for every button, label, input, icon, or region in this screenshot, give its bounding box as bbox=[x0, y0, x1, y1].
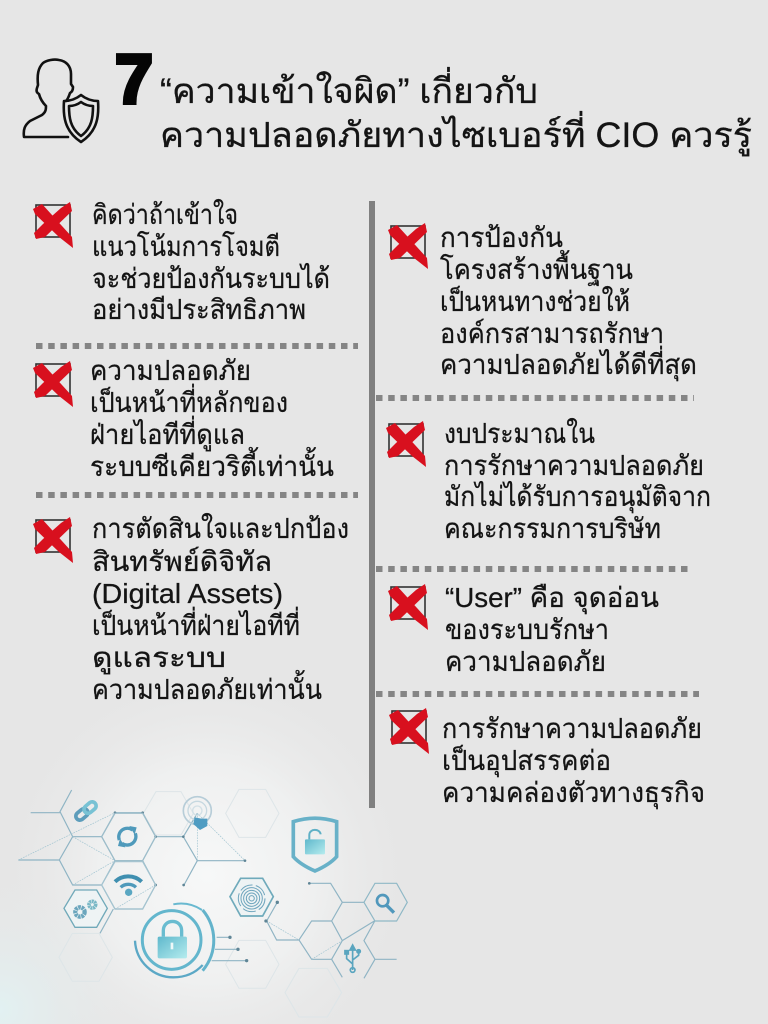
text: item 5: การรักษาความปลอดภัย bbox=[444, 450, 704, 481]
text: item 4: โครงสร้างพื้นฐาน bbox=[440, 250, 633, 286]
icon: red cross bbox=[389, 708, 429, 754]
text: item 3: การตัดสินใจและปกป้อง bbox=[92, 513, 349, 544]
icon: touch signal bbox=[183, 797, 211, 830]
icon: red cross bbox=[388, 223, 428, 269]
icon: fingerprint hexagon bbox=[230, 878, 273, 916]
illustration: cyber security network bbox=[18, 789, 407, 1017]
icon: red cross bbox=[388, 584, 428, 630]
icon: red cross bbox=[33, 202, 73, 248]
text: item 6: ของระบบรักษา bbox=[445, 614, 609, 645]
icon: user with shield bbox=[24, 60, 98, 142]
text: item 7: เป็นอุปสรรคต่อ bbox=[442, 743, 611, 778]
text: item 2: ฝ่ายไอทีที่ดูแล bbox=[90, 416, 245, 452]
text: item 2: ความปลอดภัย bbox=[90, 355, 251, 386]
right item 3 bbox=[388, 582, 659, 677]
text: item 6: ความปลอดภัย bbox=[445, 646, 606, 677]
text: item 6: “User” คือ จุดอ่อน bbox=[445, 582, 659, 615]
left item 3 bbox=[33, 513, 349, 705]
text: item 3: สินทรัพย์ดิจิทัล bbox=[92, 546, 272, 577]
left item 1 bbox=[33, 199, 330, 325]
text: item 2: ระบบซีเคียวริตี้เท่านั้น bbox=[90, 447, 334, 482]
icon: gears hexagon bbox=[64, 890, 107, 927]
text: item 4: องค์กรสามารถรักษา bbox=[440, 318, 664, 349]
text: item 3: เป็นหน้าที่ฝ่ายไอทีที่ bbox=[92, 607, 300, 641]
text: item 5: คณะกรรมการบริษัท bbox=[444, 513, 661, 544]
text: item 1: แนวโน้มการโจมตี bbox=[92, 231, 280, 262]
icon: big padlock with rings bbox=[135, 904, 214, 977]
icon: shield with lock bbox=[293, 818, 337, 871]
text: item 1: อย่างมีประสิทธิภาพ bbox=[92, 294, 306, 325]
text: item 4: การป้องกัน bbox=[440, 222, 563, 253]
icon: red cross bbox=[33, 361, 73, 407]
text: item 1: คิดว่าถ้าเข้าใจ bbox=[92, 199, 238, 230]
icon: red cross bbox=[386, 421, 426, 467]
text: item 7: การรักษาความปลอดภัย bbox=[442, 713, 702, 744]
icon: wifi hexagon bbox=[102, 862, 156, 909]
text: item 5 bbox=[444, 418, 711, 544]
text: item 4: เป็นหนทางช่วยให้ bbox=[440, 284, 630, 317]
icon: usb bbox=[345, 945, 360, 972]
text: item 5: งบประมาณใน bbox=[444, 418, 595, 449]
text: item 3: ดูแลระบบ bbox=[92, 642, 226, 675]
text: item 3 bbox=[92, 513, 349, 705]
title bbox=[115, 40, 752, 156]
title line 2: ความปลอดภัยทางไซเบอร์ที่ CIO ควรรู้ bbox=[160, 111, 752, 156]
icon: search hexagon bbox=[364, 883, 407, 921]
text: item 7 bbox=[442, 713, 705, 810]
text: item 7: ความคล่องตัวทางธุรกิจ bbox=[442, 777, 705, 810]
text: item 2 bbox=[90, 355, 334, 482]
network nodes bbox=[114, 811, 311, 962]
right item 2 bbox=[386, 418, 711, 544]
column divider bbox=[369, 201, 375, 808]
title line 1: “ความเข้าใจผิด” เกี่ยวกับ bbox=[160, 67, 538, 111]
text: item 3: (Digital Assets) bbox=[92, 578, 283, 609]
right item 1 bbox=[388, 222, 697, 382]
title number 7: 7 bbox=[115, 40, 153, 118]
text: item 2: เป็นหน้าที่หลักของ bbox=[90, 384, 288, 418]
left item 2 bbox=[33, 355, 334, 482]
text: item 3: ความปลอดภัยเท่านั้น bbox=[92, 670, 322, 705]
icon: refresh hexagon bbox=[102, 813, 156, 861]
right item 4 bbox=[389, 708, 705, 810]
network lines bbox=[18, 790, 397, 978]
text: item 1 bbox=[92, 199, 330, 325]
faint hexagons bbox=[59, 789, 342, 1017]
icon: link bbox=[74, 800, 98, 822]
text: item 4 bbox=[440, 222, 697, 382]
text: item 4: ความปลอดภัยได้ดีที่สุด bbox=[440, 346, 697, 382]
text: item 6 bbox=[445, 582, 659, 677]
text: item 5: มักไม่ได้รับการอนุมัติจาก bbox=[444, 481, 711, 514]
text: item 1: จะช่วยป้องกันระบบได้ bbox=[92, 263, 330, 294]
icon: red cross bbox=[33, 517, 73, 563]
